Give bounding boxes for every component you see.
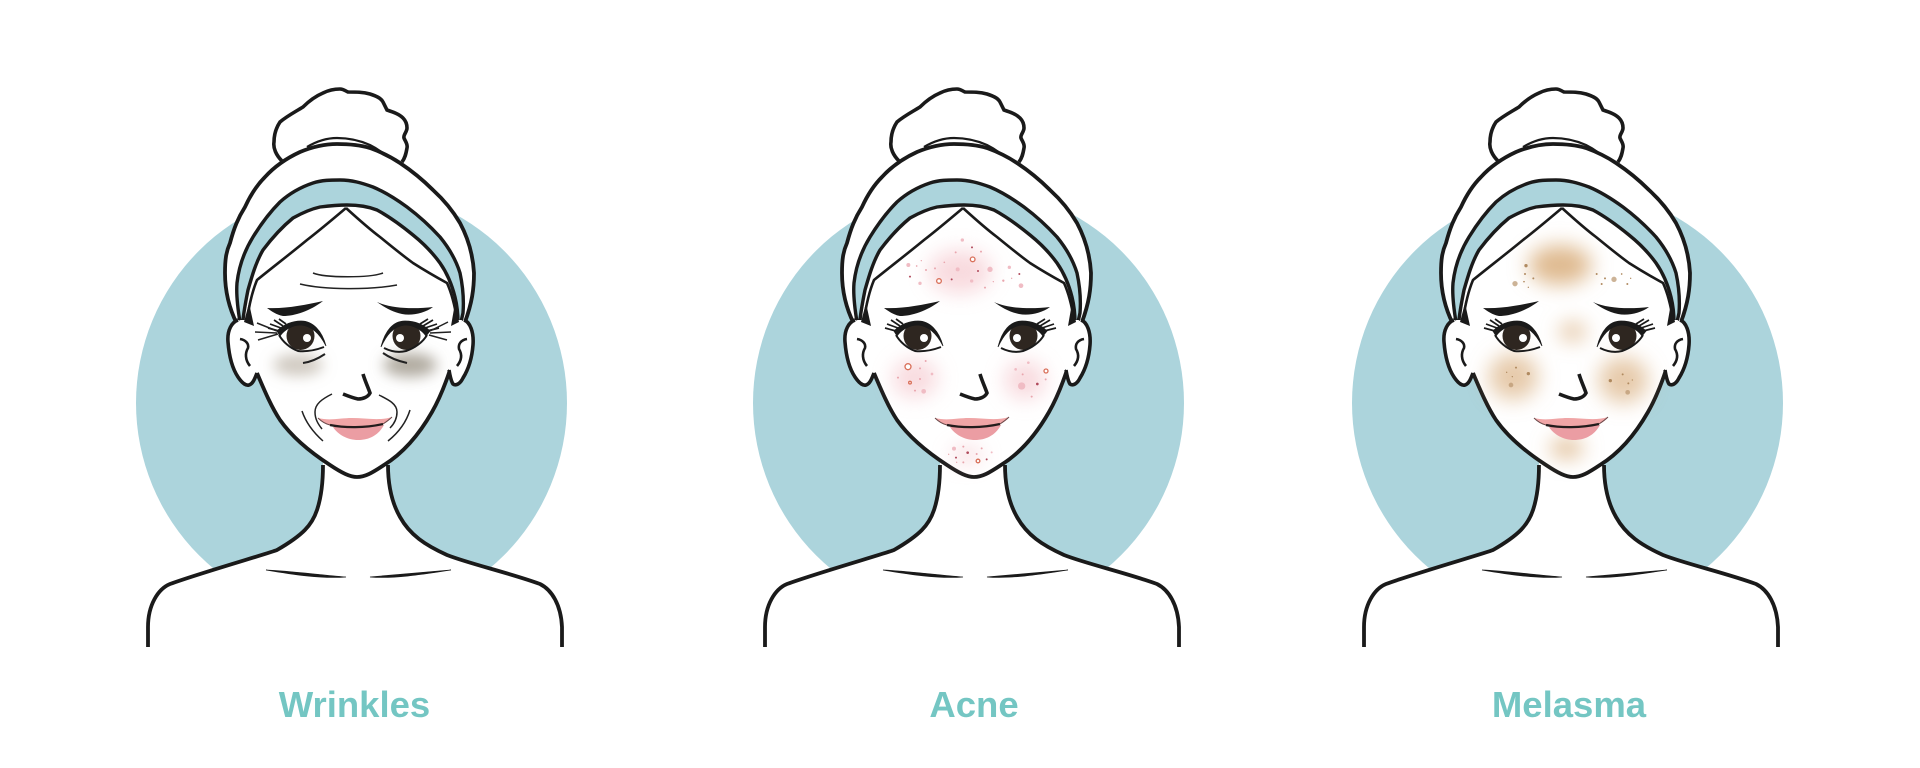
label: Wrinkles: Wrinkles — [279, 684, 430, 725]
background circle — [1352, 188, 1783, 618]
acne redness patches — [892, 250, 1046, 463]
melasma spots — [1506, 264, 1633, 395]
background circle — [136, 188, 567, 618]
dark under-eye circles — [273, 353, 437, 377]
nose — [960, 374, 987, 399]
hair bun and headband — [1441, 89, 1690, 324]
neck and shoulders — [1364, 460, 1778, 650]
panel: melasma — [1352, 89, 1783, 725]
eyebrows — [267, 301, 433, 316]
acne spots — [897, 238, 1048, 463]
face and ears — [1444, 303, 1689, 477]
eyebrows — [884, 301, 1050, 316]
lips — [318, 417, 392, 440]
melasma pigment patches — [1488, 245, 1648, 458]
panel: acne — [753, 89, 1184, 725]
hair bun and headband — [225, 89, 474, 324]
eyebrows — [1483, 301, 1649, 316]
nose — [343, 374, 370, 399]
label: Melasma: Melasma — [1492, 684, 1647, 725]
eyes — [268, 319, 439, 352]
face and ears — [845, 303, 1090, 477]
hair bun and headband — [842, 89, 1091, 324]
label: Acne: Acne — [929, 684, 1019, 725]
face and ears — [228, 303, 473, 477]
wrinkle lines — [255, 273, 451, 441]
lips — [935, 417, 1009, 440]
panel: wrinkles — [136, 89, 567, 725]
nose — [1559, 374, 1586, 399]
eyes — [1484, 319, 1655, 352]
neck and shoulders — [148, 460, 562, 650]
neck and shoulders — [765, 460, 1179, 650]
eyes — [885, 319, 1056, 352]
background circle — [753, 188, 1184, 618]
lips — [1534, 417, 1608, 440]
